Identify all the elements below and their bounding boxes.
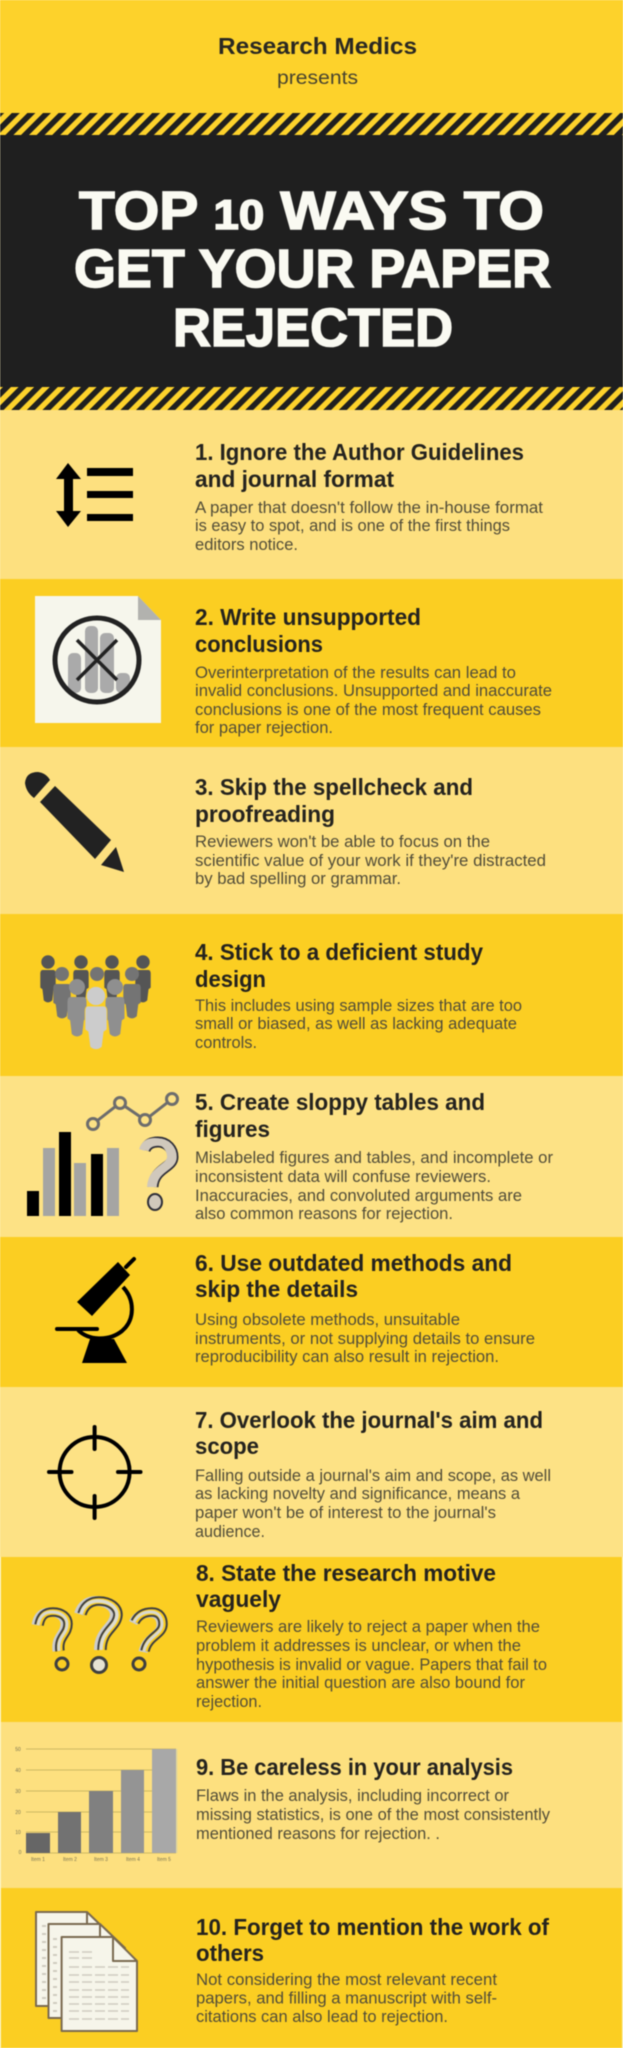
heading 10: others: [196, 1940, 264, 1966]
title banner: [0, 113, 623, 410]
body 2: Overinterpretation of the results can lead to: [195, 664, 516, 682]
title: REJECTED: [173, 298, 453, 358]
body 8: answer the initial question are also bound for: [196, 1674, 525, 1692]
body 6: [195, 1311, 535, 1366]
body 10: papers, and filling a manuscript with self-: [196, 1990, 497, 2008]
chart axis labels: 0: [19, 1850, 22, 1856]
panel 2: unsupported conclusions: [0, 579, 623, 747]
body 3: [195, 833, 546, 888]
chart axis labels: Item 4: [126, 1857, 140, 1863]
heading 1: 1. Ignore the Author Guidelines: [195, 439, 524, 465]
body 3: by bad spelling or grammar.: [195, 870, 401, 888]
panel 3: spellcheck: [0, 747, 623, 914]
header: presenter: [0, 0, 623, 135]
chart axis labels: 40: [15, 1768, 21, 1774]
body 2: invalid conclusions. Unsupported and inaccurate: [195, 682, 552, 700]
heading 9: 9. Be careless in your analysis: [196, 1754, 513, 1780]
panel 9: careless analysis: [1, 1722, 622, 1888]
icon: pencil: [25, 772, 124, 872]
body 8: Reviewers are likely to reject a paper when the: [196, 1618, 540, 1636]
heading 10: [196, 1914, 549, 1966]
chart axis labels: Item 5: [157, 1857, 171, 1863]
body 1: [195, 499, 543, 554]
chart axis labels: 10: [15, 1830, 21, 1836]
body 7: as lacking novelty and significance, means a: [195, 1485, 521, 1503]
heading 5: 5. Create sloppy tables and: [195, 1089, 485, 1115]
heading 4: design: [195, 966, 266, 992]
body 2: for paper rejection.: [195, 719, 333, 737]
body 8: hypothesis is invalid or vague. Papers that fail to: [196, 1656, 547, 1674]
body 1: A paper that doesn't follow the in-house format: [195, 499, 543, 517]
heading 4: [195, 939, 483, 992]
panel 4: study design: [0, 914, 623, 1076]
body 8: [196, 1618, 547, 1711]
body 9: [196, 1787, 551, 1843]
body 9: Flaws in the analysis, including incorrect or: [196, 1787, 510, 1805]
body 4: This includes using sample sizes that are too: [195, 997, 522, 1015]
body 6: Using obsolete methods, unsuitable: [195, 1311, 460, 1329]
body 10: citations can also lead to rejection.: [196, 2008, 448, 2026]
body 3: Reviewers won't be able to focus on the: [195, 833, 490, 851]
body 8: rejection.: [196, 1693, 262, 1711]
icon: crosshair: [49, 1427, 140, 1518]
heading 8: [196, 1560, 496, 1612]
body 5: Mislabeled figures and tables, and incomplete or: [195, 1149, 554, 1167]
title: GET YOUR PAPER: [74, 239, 551, 299]
body 6: reproducibility can also result in rejection.: [195, 1348, 499, 1366]
heading 7: [195, 1407, 543, 1459]
heading 10: 10. Forget to mention the work of: [196, 1914, 549, 1940]
body 1: editors notice.: [195, 536, 298, 554]
chart axis labels: 30: [15, 1789, 21, 1795]
heading 3: [195, 774, 473, 827]
body 5: inconsistent data will confuse reviewers.: [195, 1168, 491, 1186]
body 2: conclusions is one of the most frequent causes: [195, 701, 541, 719]
chart axis labels: 50: [15, 1747, 21, 1753]
heading 3: proofreading: [195, 801, 335, 827]
icon: sloppy chart with question mark: [27, 1094, 178, 1216]
icon: stacked documents: [36, 1912, 137, 2031]
panel 7: aim and scope: [0, 1387, 623, 1557]
heading 2: 2. Write unsupported: [195, 604, 421, 630]
body 10: Not considering the most relevant recent: [196, 1971, 497, 1989]
body 4: [195, 997, 522, 1052]
heading 6: 6. Use outdated methods and: [195, 1250, 512, 1276]
chart axis labels: Item 2: [63, 1857, 77, 1863]
body 7: [195, 1467, 551, 1541]
heading 4: 4. Stick to a deficient study: [195, 939, 483, 965]
heading 5: [195, 1089, 485, 1142]
body 6: instruments, or not supplying details to ensure: [195, 1330, 535, 1348]
heading 2: [195, 604, 421, 657]
heading 7: 7. Overlook the journal's aim and: [195, 1407, 543, 1433]
heading 7: scope: [195, 1433, 259, 1459]
body 7: Falling outside a journal's aim and scope, as well: [195, 1467, 551, 1485]
chart axis labels: Item 1: [31, 1857, 45, 1863]
chart axis labels: 20: [15, 1810, 21, 1816]
panel 5: tables and figures: [0, 1076, 623, 1237]
heading 3: 3. Skip the spellcheck and: [195, 774, 473, 800]
heading 6: skip the details: [195, 1276, 358, 1302]
icon: group of people: [40, 955, 151, 1050]
heading 8: vaguely: [196, 1586, 281, 1612]
body 5: [195, 1149, 554, 1223]
heading 1: and journal format: [195, 466, 394, 492]
title: TOP 10 WAYS TO: [79, 181, 544, 241]
icon: microscope: [55, 1259, 134, 1363]
body 5: also common reasons for rejection.: [195, 1205, 453, 1223]
heading 8: 8. State the research motive: [196, 1560, 496, 1586]
panel 6: outdated methods: [0, 1237, 623, 1387]
body 8: problem it addresses is unclear, or when the: [196, 1637, 521, 1655]
body 9: missing statistics, is one of the most consistently: [196, 1806, 551, 1824]
body 7: paper won't be of interest to the journal's: [195, 1504, 496, 1522]
body 9: mentioned reasons for rejection. .: [196, 1825, 440, 1843]
presents label: presents: [277, 68, 358, 89]
presenter name: Research Medics: [218, 33, 417, 59]
heading 2: conclusions: [195, 631, 323, 657]
panel 10: work of others: [1, 1888, 622, 2048]
title: [74, 181, 551, 358]
icon: line spacing: [56, 463, 133, 527]
chart axis labels: [15, 1747, 171, 1863]
body 2: [195, 664, 552, 737]
body 4: small or biased, as well as lacking adequate: [195, 1015, 517, 1033]
body 4: controls.: [195, 1034, 257, 1052]
heading 5: figures: [195, 1116, 270, 1142]
panel 8: research motive: [1, 1557, 622, 1722]
body 1: is easy to spot, and is one of the first things: [195, 517, 510, 535]
body 7: audience.: [195, 1523, 265, 1541]
icon: three question marks: [36, 1601, 163, 1672]
body 10: [196, 1971, 497, 2026]
bar chart: [15, 1747, 178, 1863]
body 3: scientific value of your work if they're distracted: [195, 852, 546, 870]
icon: rejected chart document: [35, 596, 161, 723]
chart axis labels: Item 3: [94, 1857, 108, 1863]
panel 1: author guidelines: [0, 410, 623, 579]
body 5: Inaccuracies, and convoluted arguments are: [195, 1187, 522, 1205]
heading 6: [195, 1250, 512, 1302]
heading 1: [195, 439, 524, 492]
